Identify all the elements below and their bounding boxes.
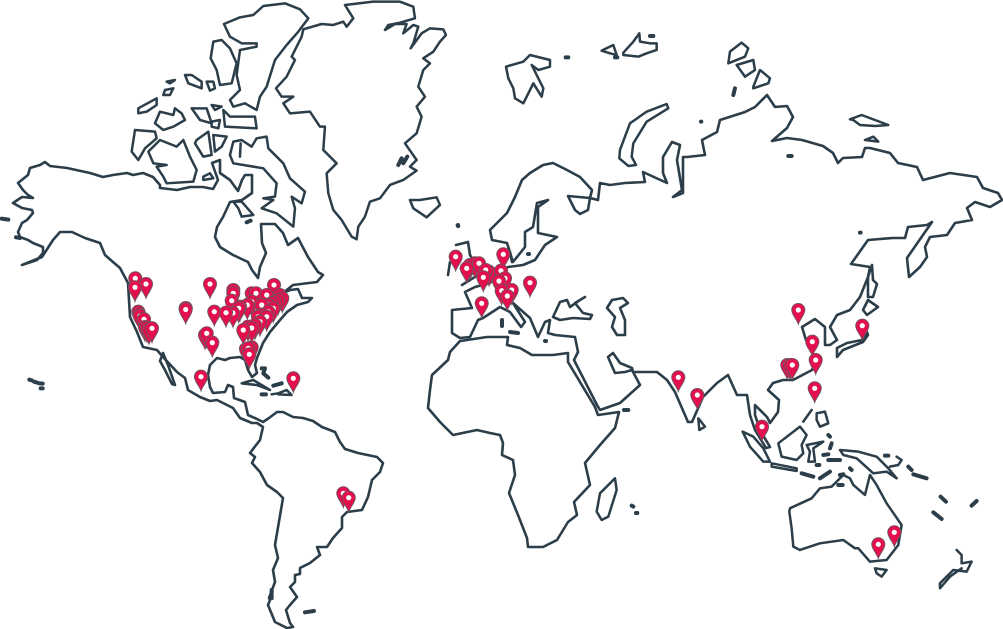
location pins: Europe	[449, 248, 537, 318]
arctic Canada and Greenland	[2, 2, 458, 239]
Japan, Sakhalin and Taiwan	[837, 265, 878, 357]
landmass: Africa	[428, 337, 619, 547]
location pins: North America east	[198, 278, 289, 369]
arctic Russian islands	[506, 33, 888, 233]
landmass: Eurasia	[452, 95, 1002, 448]
location pins: Brazil	[337, 487, 355, 512]
Caribbean and Pacific islands	[29, 368, 314, 612]
location pins: Asia	[672, 303, 869, 441]
Southeast Asia and Oceania islands	[597, 410, 977, 588]
European seas and islands	[448, 225, 628, 341]
landmass: the Americas	[13, 160, 383, 628]
location pins: North America west	[128, 272, 300, 393]
location pins: Australia	[872, 526, 901, 559]
